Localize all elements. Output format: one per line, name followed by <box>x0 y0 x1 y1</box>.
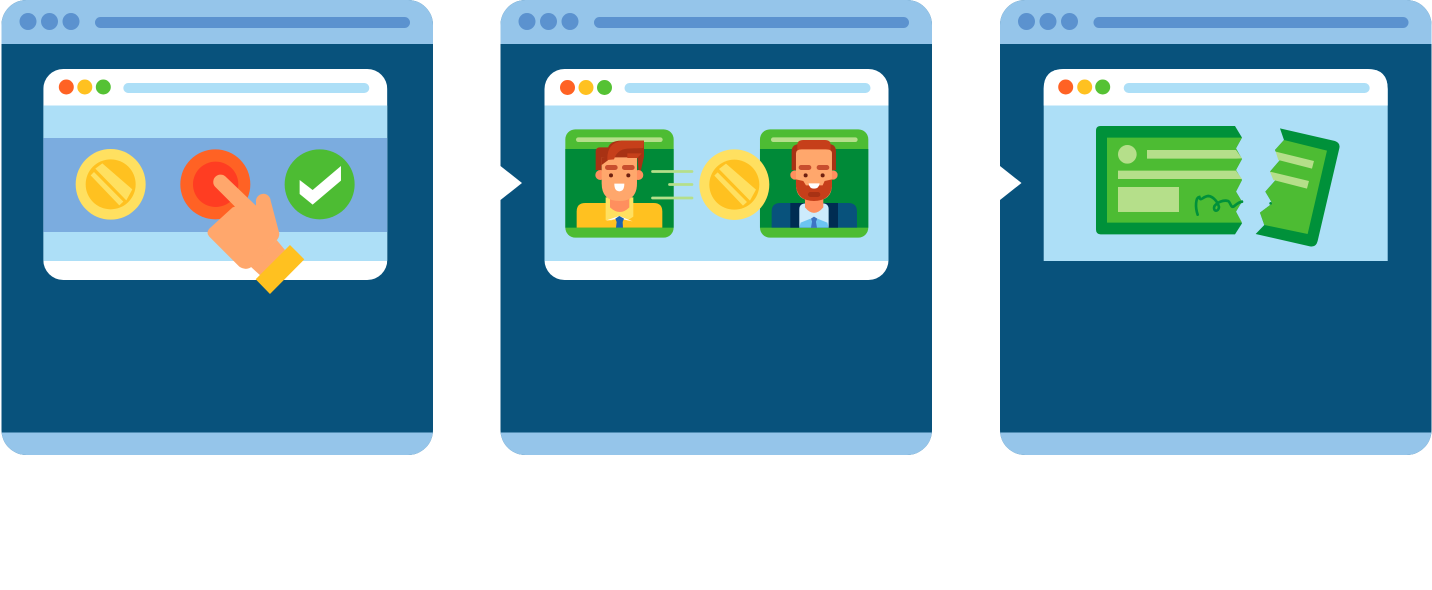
icon: red button <box>180 149 250 219</box>
icon: torn contract left half <box>1096 126 1242 234</box>
icon: pointing hand <box>207 175 304 294</box>
icon: coin in transit <box>699 149 769 220</box>
icon: torn contract right half <box>1256 128 1340 247</box>
browser frame <box>500 0 932 456</box>
portrait: receiver <box>760 129 868 238</box>
panel: step 2 browser <box>500 0 932 456</box>
speed lines <box>652 172 692 198</box>
portrait: sender <box>565 129 674 238</box>
infographic <box>2 0 1432 455</box>
panel: step 3 browser <box>1000 0 1432 456</box>
icon: coin <box>76 149 146 220</box>
inner window <box>1044 69 1388 261</box>
panel: step 1 browser <box>2 0 433 456</box>
icon: green check <box>285 149 355 219</box>
inner window <box>544 69 888 280</box>
browser frame <box>2 0 433 456</box>
inner window <box>43 69 387 280</box>
browser frame <box>1000 0 1432 456</box>
